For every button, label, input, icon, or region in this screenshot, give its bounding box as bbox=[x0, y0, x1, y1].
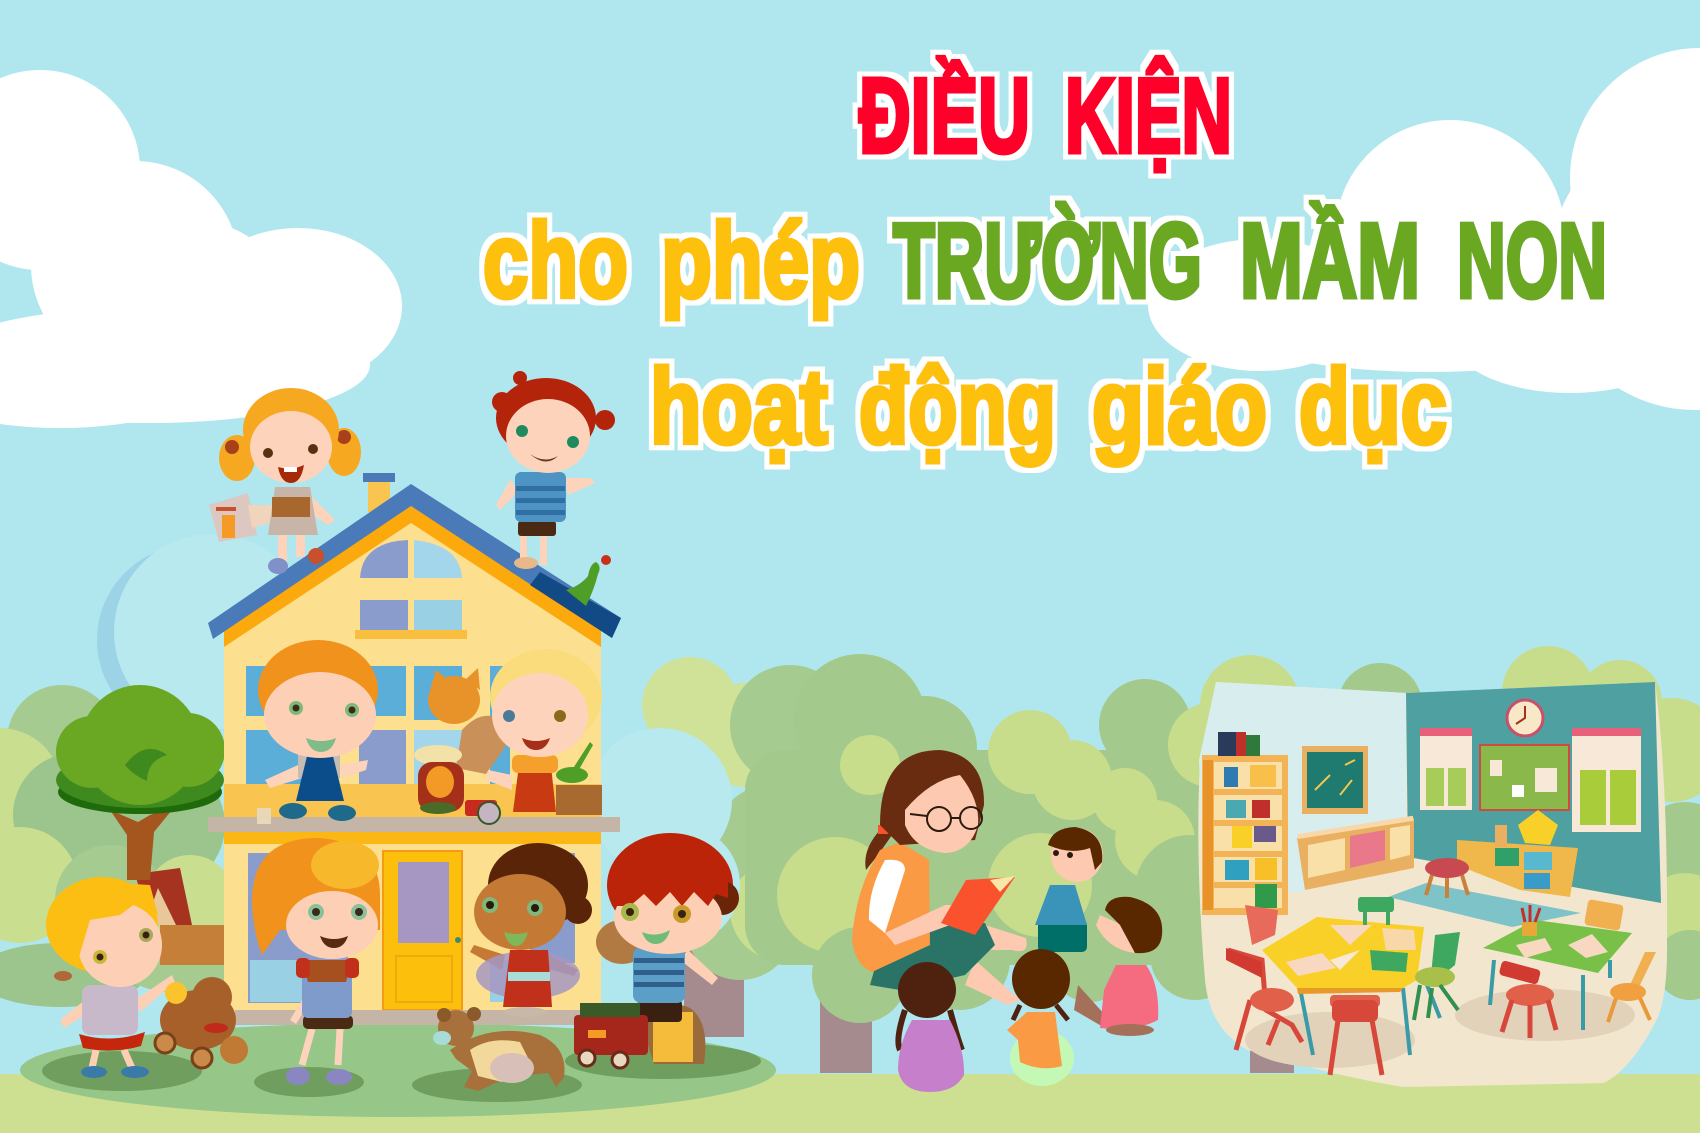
house bbox=[208, 473, 621, 1025]
title line 2: yellow and green: TRƯỜNG bbox=[893, 202, 1202, 320]
child: girl on roof with paper bbox=[209, 388, 361, 574]
boy standing bbox=[1035, 827, 1103, 952]
green chairs bbox=[1358, 897, 1460, 1020]
left white cloud bbox=[0, 70, 402, 428]
door bbox=[383, 851, 462, 1010]
teddy bear toy bbox=[155, 977, 248, 1068]
foundation bbox=[235, 1010, 595, 1025]
child: curly-haired boy bbox=[470, 843, 592, 1017]
child: red-haired boy on right bbox=[596, 833, 739, 1022]
title line 2: yellow and green: NON bbox=[1457, 202, 1607, 320]
classroom illustration bbox=[1198, 682, 1667, 1087]
background trees right bbox=[1502, 646, 1700, 1000]
toy horse and block bbox=[640, 1005, 705, 1064]
attic window bbox=[355, 540, 467, 639]
chimney bbox=[363, 473, 395, 512]
chalkboard bbox=[1302, 746, 1368, 814]
title line 2: yellow and green bbox=[483, 202, 1607, 320]
dog bbox=[433, 1007, 564, 1091]
house walls bbox=[224, 520, 601, 1015]
notice board bbox=[1480, 745, 1569, 810]
sleeve bbox=[869, 860, 905, 933]
lawn under house bbox=[20, 1023, 776, 1117]
toy bird on roof bbox=[566, 555, 611, 606]
toy train bbox=[574, 1003, 648, 1068]
classroom floor bbox=[1198, 682, 1667, 1087]
book bbox=[941, 877, 1015, 935]
title line 2: yellow and green: cho bbox=[483, 202, 628, 320]
pale crescent cloud behind house bbox=[97, 534, 310, 735]
teacher shorts bbox=[870, 923, 995, 990]
right cabinet with toy house bbox=[1457, 810, 1578, 897]
right window bbox=[1572, 728, 1641, 832]
title bbox=[483, 57, 1607, 466]
teacher legs bbox=[985, 925, 1027, 951]
child: blond boy on lawn bbox=[252, 838, 380, 1085]
title line 2: yellow and green: phép bbox=[661, 202, 860, 320]
right white cloud bbox=[1148, 48, 1700, 410]
teacher arm bbox=[885, 905, 955, 945]
title line 3: yellow bbox=[650, 348, 1447, 466]
title line 1: red: ĐIỀU bbox=[859, 57, 1030, 175]
title line 3: yellow: dục bbox=[1299, 348, 1447, 466]
title line 3: yellow: hoạt bbox=[650, 348, 828, 466]
left window bbox=[1420, 728, 1472, 810]
child: boy in upper window bbox=[258, 640, 378, 821]
roof orange band bbox=[224, 506, 601, 647]
upper windows bbox=[224, 666, 601, 817]
grass ground bbox=[0, 1074, 1700, 1133]
roof bbox=[208, 484, 621, 639]
floor shadows bbox=[1245, 989, 1635, 1068]
green table bbox=[1483, 905, 1632, 1030]
title line 1: red: KIỆN bbox=[1065, 57, 1232, 175]
chair legs and yellow table bbox=[1262, 917, 1440, 1055]
swing frame behind house bbox=[135, 868, 224, 965]
vest bbox=[852, 842, 930, 972]
background trees behind house right bbox=[588, 657, 850, 1037]
teacher face bbox=[905, 775, 978, 853]
rug bbox=[1388, 883, 1581, 927]
foreground tree bbox=[56, 685, 225, 880]
plant pot on balcony bbox=[556, 742, 602, 815]
ponytail bbox=[865, 830, 892, 870]
title line 1: red bbox=[859, 57, 1232, 175]
background trees left bbox=[0, 685, 240, 1007]
glasses bbox=[910, 807, 982, 831]
teacher hair back bbox=[880, 750, 984, 845]
low cabinet bbox=[1297, 816, 1414, 890]
tall bookshelf bbox=[1202, 732, 1288, 915]
teacher reading to children bbox=[852, 750, 1162, 1092]
child: red-haired child on roof bbox=[492, 371, 615, 569]
toys on balcony bbox=[257, 668, 510, 824]
balcony slab bbox=[208, 817, 620, 832]
seated child right bbox=[1074, 897, 1162, 1036]
left white wall bbox=[1199, 682, 1406, 892]
title line 3: yellow: động bbox=[859, 348, 1056, 466]
background trees centre bbox=[745, 654, 1422, 1073]
child: blonde child in upper window bbox=[486, 649, 602, 812]
title line 2: yellow and green: MẦM bbox=[1240, 202, 1420, 320]
title line 3: yellow: giáo bbox=[1092, 348, 1267, 466]
orange chairs bbox=[1584, 899, 1656, 1022]
girl in orange bbox=[1007, 949, 1074, 1086]
red chairs near table bbox=[1226, 905, 1556, 1075]
girl with braids bbox=[898, 962, 964, 1092]
lower window bbox=[248, 853, 575, 1003]
stool bbox=[1425, 858, 1469, 898]
clock bbox=[1507, 700, 1543, 736]
teal wall bbox=[1406, 682, 1661, 903]
child: blond girl on left lawn bbox=[46, 877, 175, 1078]
